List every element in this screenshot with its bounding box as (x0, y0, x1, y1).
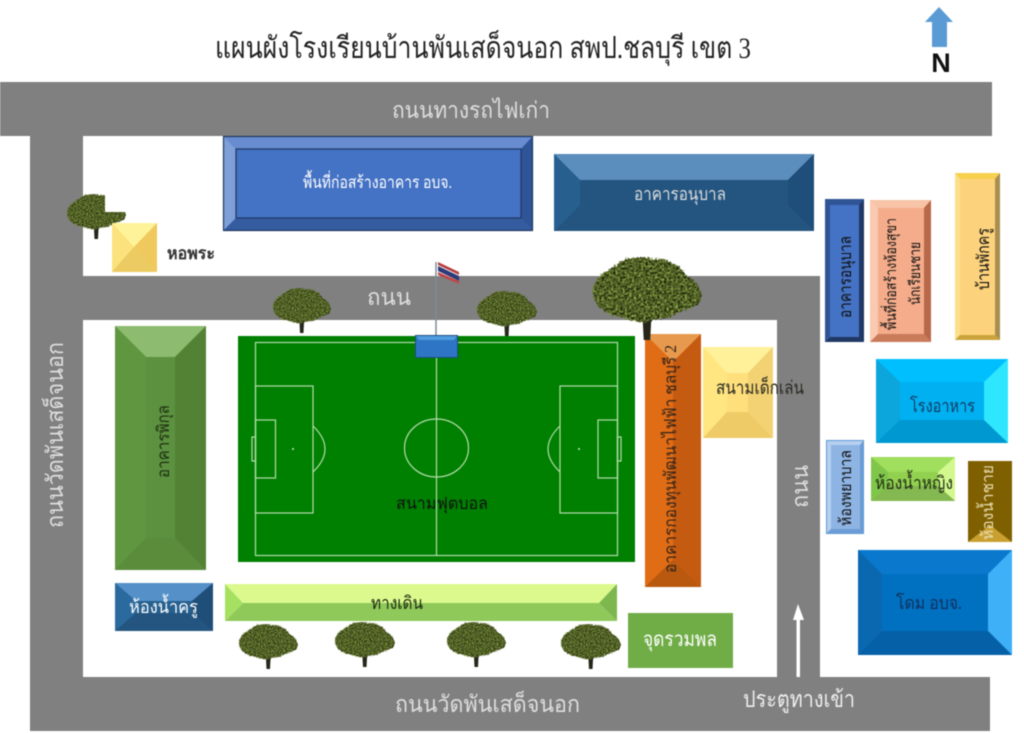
label: male students: นักเรียนชาย (907, 242, 924, 305)
label: construction area: พื้นที่ก่อสร้างอาคาร อบจ. (303, 170, 452, 192)
label: shrine: หอพระ (167, 244, 215, 263)
icon: north arrow: N (931, 48, 951, 78)
road label: east road: ถนน (788, 465, 813, 508)
label: kindergarten: อาคารอนุบาล (634, 184, 726, 205)
tree: bottom 2 (335, 622, 395, 667)
label: electricity fund building: อาคารกองทุนพัฒนาไฟฟ้า ชลบุรี 2 (660, 345, 681, 573)
building: student toilet construction area (870, 200, 931, 342)
road label: entrance gate: ประตูทางเข้า (743, 687, 855, 713)
football field (238, 336, 635, 562)
tree: road left (273, 288, 331, 333)
label: assembly point: จุดรวมพล (643, 629, 717, 652)
building: nursing room (826, 440, 864, 534)
label: teacher house: บ้านพักครู (974, 228, 994, 290)
label: dome: โดม อบจ. (896, 592, 962, 613)
label: nursing room: ห้องพยาบาล (837, 450, 855, 526)
building: electricity fund building (645, 334, 701, 587)
road label: old railway road: ถนนทางรถไฟเก่า (392, 97, 550, 123)
label: playground: สนามเด็กเล่น (716, 375, 804, 399)
label: monk building: อาคารพิกุล (154, 405, 174, 478)
label: football field: สนามฟุตบอล (396, 494, 488, 514)
label: cafeteria: โรงอาหาร (910, 395, 975, 416)
label: male toilet: ห้องน้ำชาย (976, 465, 997, 540)
label: kindergarten vertical: อาคารอนุบาล (836, 236, 856, 318)
arrow: entrance (793, 604, 804, 677)
tree: bottom 4 (561, 624, 621, 669)
tree: large (593, 257, 702, 340)
building: shrine (112, 223, 157, 272)
tree: bottom 1 (239, 624, 298, 669)
road label: wat road vertical: ถนนวัดพันเสด็จนอก (40, 342, 68, 528)
label: female toilet: ห้องน้ำหญิง (875, 470, 953, 493)
building: dome (858, 550, 1012, 655)
label: teacher toilet: ห้องน้ำครู (129, 594, 198, 618)
building: kindergarten vertical (825, 199, 864, 342)
label: walkway: ทางเดิน (371, 593, 423, 613)
title: แผนผังโรงเรียนบ้านพันเสด็จนอก สพป.ชลบุรี เขต 3 (215, 29, 751, 67)
walkway (225, 584, 617, 621)
icon: flag pole and flag (436, 262, 459, 336)
tree: road right (477, 291, 537, 336)
tree: bottom 3 (447, 622, 506, 667)
building: kindergarten (554, 154, 814, 231)
building: monk building (115, 326, 206, 570)
building: female toilet (871, 457, 955, 501)
road label: wat road bottom: ถนนวัดพันเสด็จนอก (395, 689, 580, 717)
icon: north arrow (925, 7, 953, 78)
building: playground (703, 347, 773, 438)
building: cafeteria (876, 359, 1008, 443)
road label: middle road: ถนน (367, 285, 411, 310)
tree: north west (67, 192, 127, 239)
building: teacher house (955, 173, 1000, 340)
assembly point (628, 613, 733, 668)
building: male toilet (968, 461, 1012, 542)
building: teacher toilet (115, 583, 213, 631)
label: student toilet construction: พื้นที่ก่อสร้างห้องสุขา (880, 218, 901, 330)
podium (415, 335, 458, 358)
building: construction area (223, 136, 533, 231)
